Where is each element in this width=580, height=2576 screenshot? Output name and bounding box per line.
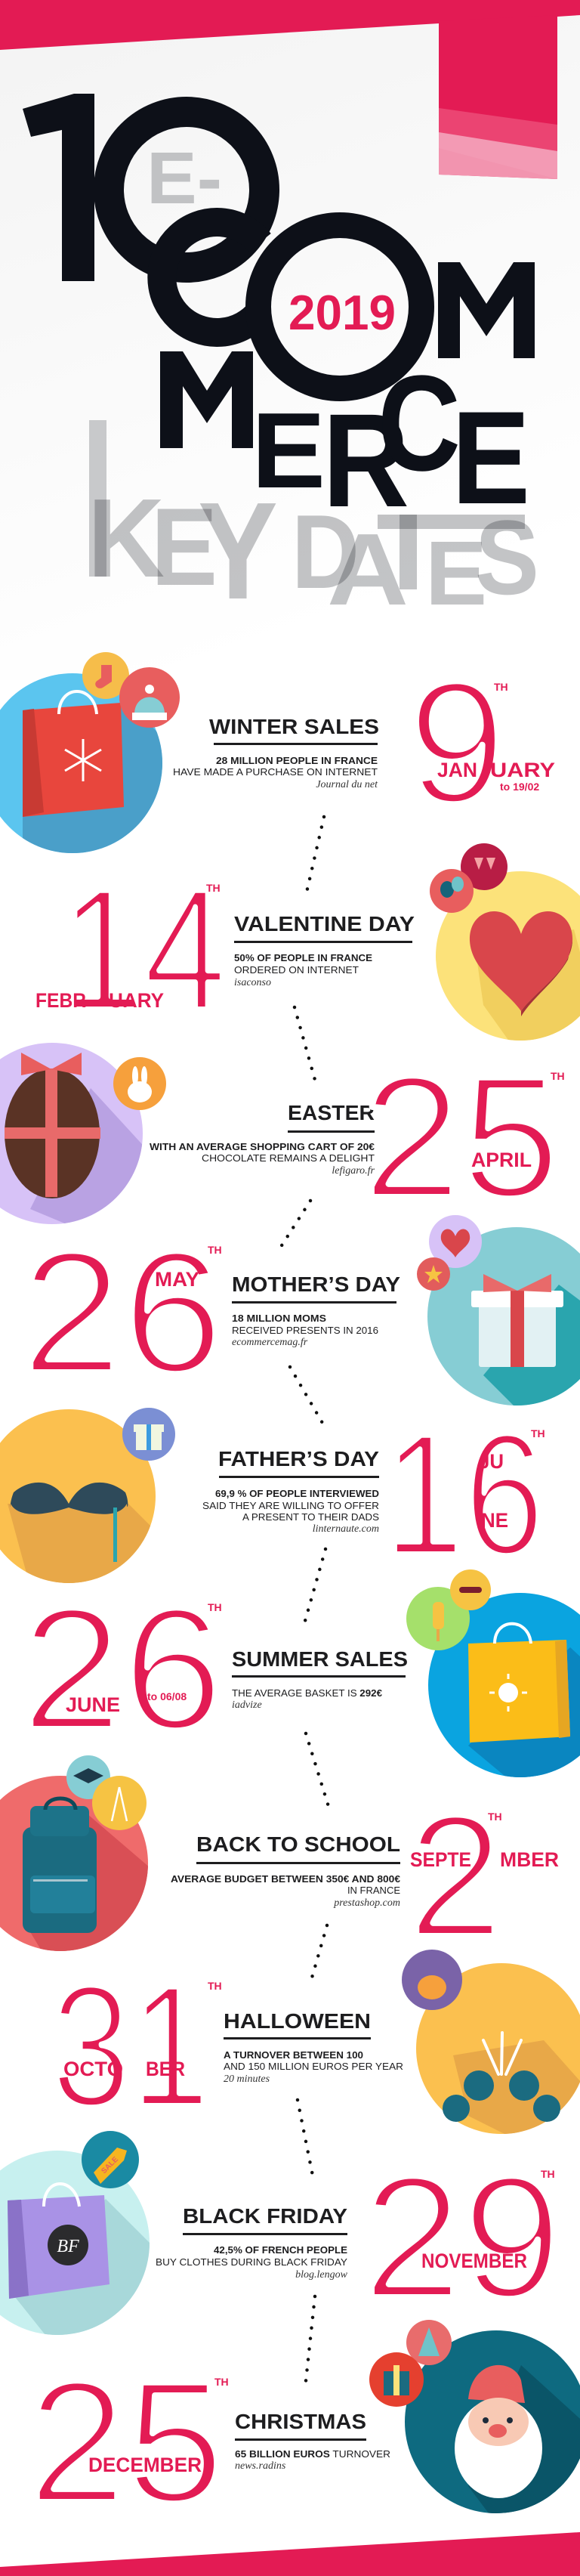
text: christmas: 65 BILLION EUROS TURNOVER (235, 2448, 390, 2460)
text: christmas: CHRISTMAS (235, 2410, 366, 2433)
text: back to school: prestashop.com (333, 1897, 400, 1909)
date: 25th april: 25 (362, 1040, 560, 1234)
text: halloween (224, 2009, 403, 2085)
text: easter: CHOCOLATE REMAINS A DELIGHT (202, 1152, 375, 1164)
date: 2nd september: 2 (408, 1779, 503, 1973)
date: 2nd september: TH (488, 1811, 502, 1823)
text: back to school: IN FRANCE (347, 1885, 400, 1896)
text: summer sales: SUMMER SALES (232, 1647, 408, 1671)
title: 10 E-COMMERCE 2019 KEY DATES: C (378, 348, 461, 499)
date: 2nd september: SEPTE (410, 1848, 471, 1871)
title: O with 2019 (258, 225, 421, 388)
icon: gift circle (417, 1215, 580, 1421)
text: back to school: AVERAGE BUDGET BETWEEN 350€ AND 800€ (171, 1873, 400, 1885)
text: father's day: A PRESENT TO THEIR DADS (242, 1511, 379, 1523)
text: halloween: A TURNOVER BETWEEN 100 (224, 2049, 363, 2061)
title: C (162, 222, 260, 332)
date: 9th january: 9 (408, 645, 506, 840)
date: 29th november: NOVEMBER (421, 2250, 527, 2272)
text: black friday: 42,5% OF FRENCH PEOPLE (214, 2244, 347, 2256)
date: 26th june: to 06/08 (147, 1690, 187, 1702)
title: 10 E-COMMERCE 2019 KEY DATES: E (251, 391, 325, 511)
date: 26th may: 26 (21, 1215, 224, 1409)
text: halloween: HALLOWEEN (224, 2009, 371, 2033)
title: 10 E-COMMERCE 2019 KEY DATES: D (292, 493, 359, 611)
date: 26th june: TH (208, 1601, 222, 1613)
text: father's day (202, 1447, 379, 1535)
text: easter: WITH AN AVERAGE SHOPPING CART OF 20€ (150, 1141, 375, 1152)
text: summer sales (232, 1647, 408, 1711)
text: valentine day: ORDERED ON INTERNET (234, 964, 359, 976)
date: 31st october: 31 (51, 1949, 210, 2143)
text: winter sales: WINTER SALES (209, 715, 379, 738)
text: father's day: linternaute.com (313, 1523, 379, 1535)
text: winter sales: 28 MILLION PEOPLE IN FRANCE (216, 755, 378, 766)
text: black friday (156, 2204, 348, 2281)
date: 25th april: APRIL (471, 1149, 532, 1171)
title: big 1 (23, 94, 94, 281)
title: E-: E- (147, 137, 222, 219)
icon: black friday bag circle (0, 2131, 150, 2335)
date: 9th january: TH (494, 681, 508, 693)
title: 10 E-COMMERCE 2019 KEY DATES: Y (198, 473, 278, 628)
text: summer sales: iadvize (232, 1699, 262, 1711)
text: father's day: FATHER’S DAY (218, 1447, 379, 1470)
title: 10 E-COMMERCE 2019 KEY DATES: E (425, 521, 487, 624)
date: 29th november: TH (541, 2168, 555, 2180)
text: easter: EASTER (288, 1101, 375, 1124)
text: valentine day: isaconso (234, 977, 271, 988)
date: 9th january (408, 645, 555, 840)
text: winter sales (173, 715, 379, 790)
date: 25th december: DECEMBER (88, 2454, 202, 2476)
text: christmas: news.radins (235, 2460, 286, 2472)
icon: santa circle (369, 2320, 580, 2524)
text: father's day: SAID THEY ARE WILLING TO OFFER (202, 1500, 379, 1511)
icon: mustache circle (0, 1408, 175, 1583)
icon: heart circle (430, 843, 580, 1058)
text: black friday: BLACK FRIDAY (183, 2204, 347, 2228)
title: 10 E-COMMERCE 2019 KEY DATES: K (88, 476, 165, 601)
text: mother's day (232, 1273, 400, 1348)
date: 16th june: JU (479, 1450, 504, 1473)
date: 31st october: OCTO (63, 2058, 123, 2080)
icon: chocolate egg circle (0, 1043, 166, 1224)
text: back to school (171, 1832, 400, 1909)
date: 16th june: 16 (384, 1397, 545, 1591)
date: 14th february: FEBR (35, 989, 86, 1012)
date: 16th june: TH (531, 1427, 545, 1440)
text: halloween: AND 150 MILLION EUROS PER YEAR (224, 2061, 403, 2072)
text: valentine day: 50% OF PEOPLE IN FRANCE (234, 952, 372, 963)
text: winter sales: HAVE MADE A PURCHASE ON INTERNET (173, 766, 378, 778)
title: 10 E-COMMERCE 2019 KEY DATES: R (322, 387, 409, 535)
text: valentine day (234, 912, 415, 988)
text: christmas (235, 2410, 390, 2472)
date: 26th june: JUNE (66, 1693, 120, 1716)
date: 31st october: BER (146, 2058, 185, 2080)
text: easter (150, 1101, 375, 1177)
date: 9th january: JAN (437, 759, 477, 781)
title: 10 E-COMMERCE 2019 KEY DATES: 2019 (288, 285, 396, 340)
date: 25th april: TH (551, 1070, 565, 1082)
text: black friday: blog.lengow (295, 2269, 348, 2281)
icon: backpack circle (0, 1755, 148, 1951)
date: 26th may: TH (208, 1244, 222, 1256)
title: KEY DATES gray (89, 420, 106, 577)
date: 2nd september: MBER (500, 1848, 559, 1871)
icon: winter sales bag circle (0, 652, 196, 854)
text: mother's day: MOTHER’S DAY (232, 1273, 400, 1296)
text: black friday: BUY CLOTHES DURING BLACK FRIDAY (156, 2256, 347, 2268)
text: mother's day: RECEIVED PRESENTS IN 2016 (232, 1325, 378, 1336)
icon: black friday bag circle: SALE (100, 2155, 120, 2176)
date: 16th june: NE (481, 1509, 508, 1532)
title: 10 E-COMMERCE 2019 KEY DATES: E (452, 385, 530, 532)
title: MERCE (160, 351, 253, 448)
date: 25th december: 25 (28, 2345, 224, 2539)
header: pink ribbon (439, 15, 557, 179)
date: 29th november: 29 (362, 2140, 562, 2334)
text: winter sales: Journal du net (316, 779, 378, 790)
date: 31st october: TH (208, 1980, 222, 1992)
date: 14th february: TH (206, 882, 221, 894)
date: 26th may: MAY (155, 1268, 199, 1291)
title: 10 E-COMMERCE 2019 KEY DATES: S (475, 498, 539, 617)
date: 14th february: UARY (109, 989, 164, 1012)
icon: summer bag circle (406, 1569, 580, 1791)
header: pink top band (0, 0, 580, 50)
text: back to school: BACK TO SCHOOL (196, 1832, 400, 1856)
date: 26th june: 26 (21, 1572, 224, 1766)
text: summer sales: THE AVERAGE BASKET IS 292€ (232, 1687, 382, 1699)
footer: bottom pink band (0, 2532, 580, 2576)
title: big O (109, 112, 264, 267)
text: father's day: 69,9 % OF PEOPLE INTERVIEWED (215, 1488, 379, 1499)
title: M (438, 262, 535, 358)
icon: firework crackers circle (402, 1950, 580, 2146)
title: 10 E-COMMERCE 2019 KEY DATES: A (327, 512, 409, 626)
title: 10 E-COMMERCE 2019 KEY DATES (23, 94, 539, 628)
date: 9th january: UARY (490, 759, 555, 781)
text: mother's day: 18 MILLION MOMS (232, 1313, 326, 1324)
text: mother's day: ecommercemag.fr (232, 1337, 308, 1348)
text: valentine day: VALENTINE DAY (234, 912, 415, 935)
date: 9th january: to 19/02 (500, 781, 539, 793)
title: 10 E-COMMERCE 2019 KEY DATES: E (151, 485, 218, 608)
date: 14th february: 14 (60, 852, 227, 1047)
date: 25th december: TH (214, 2376, 229, 2388)
text: halloween: 20 minutes (224, 2073, 270, 2085)
date: 2nd september (408, 1779, 559, 1973)
icon: black friday bag circle: BF (57, 2237, 79, 2256)
text: easter: lefigaro.fr (332, 1165, 375, 1177)
